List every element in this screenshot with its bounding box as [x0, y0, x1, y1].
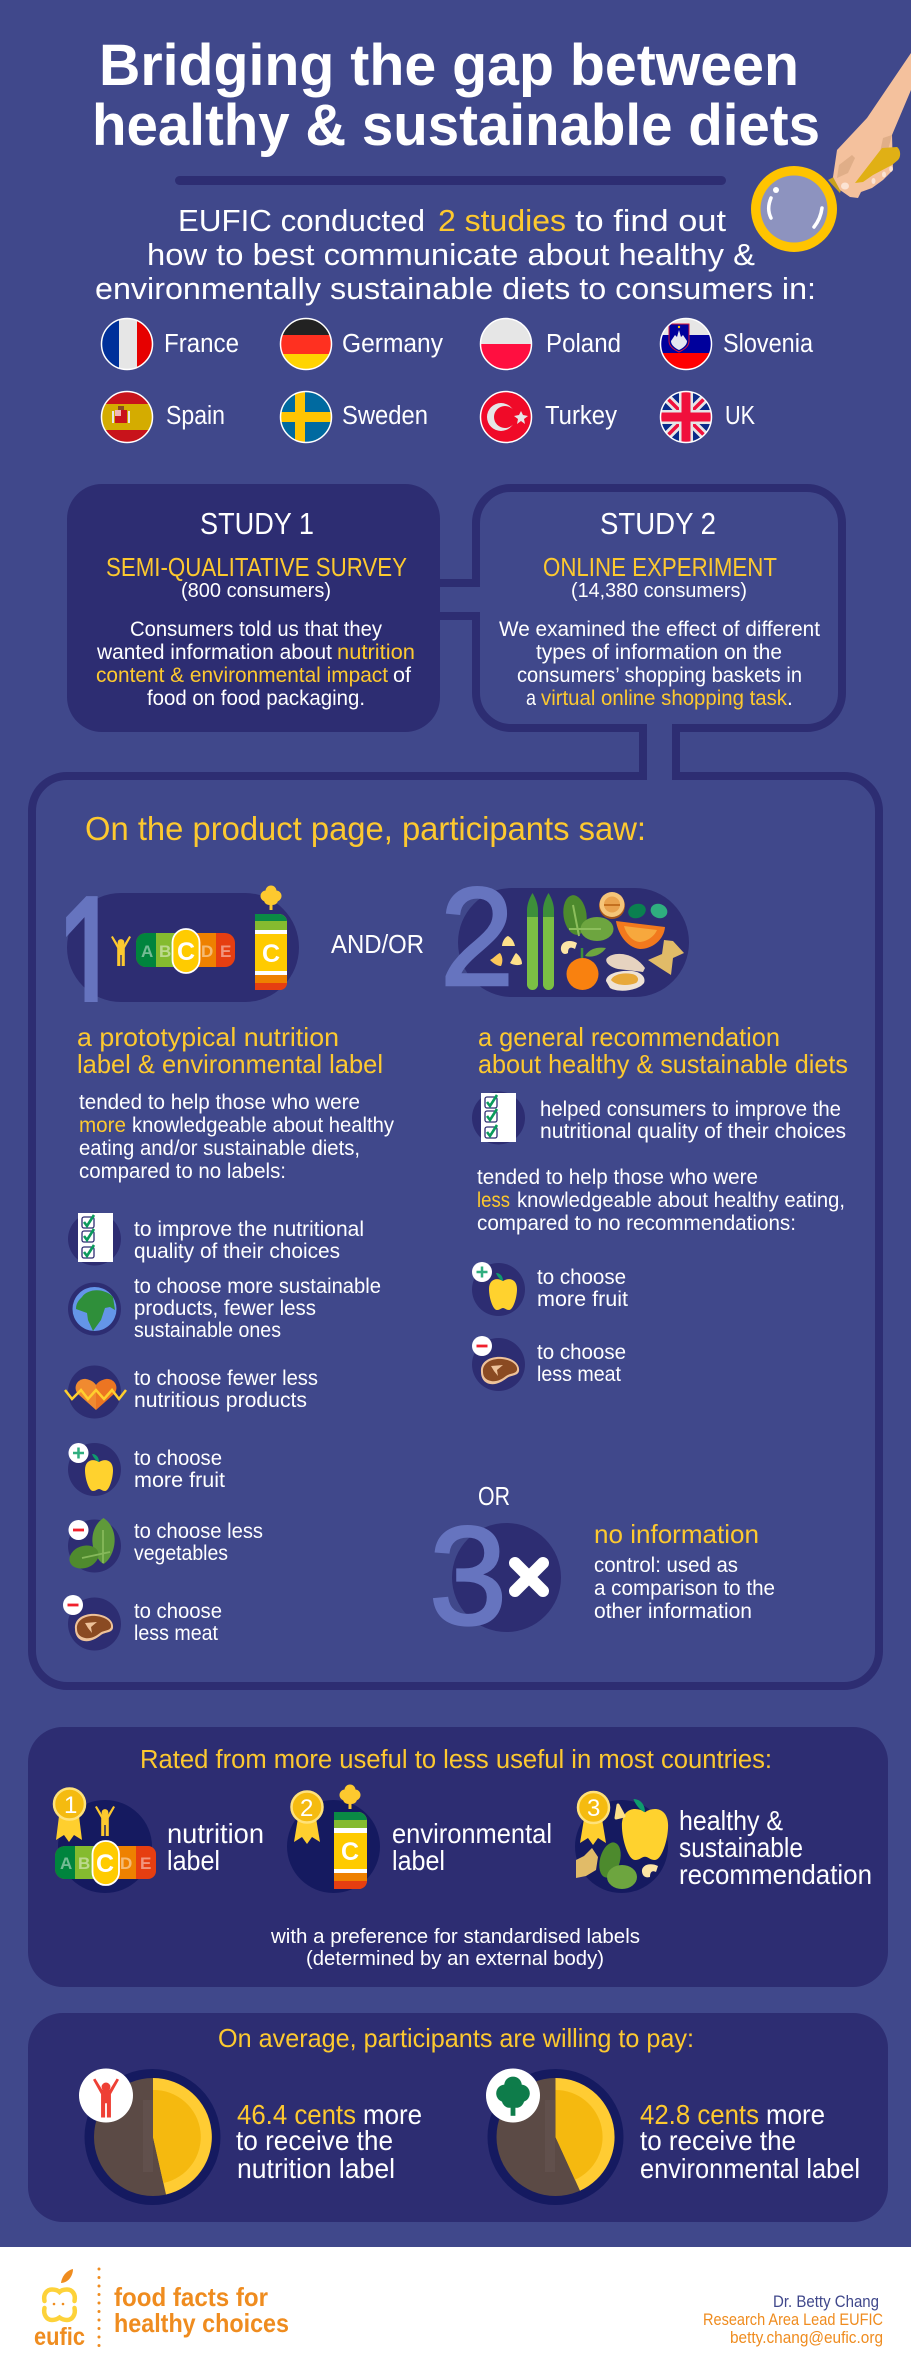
- list item: less vegetables: [66, 1518, 263, 1572]
- tagline: [114, 2282, 289, 2338]
- study 1 description: food on food packaging.: [147, 687, 365, 710]
- icon: steak minus: [63, 1595, 121, 1650]
- icon: heart with pulse: [65, 1366, 126, 1418]
- study 2 description: We examined the effect of different: [499, 618, 820, 641]
- item text: to choose: [134, 1600, 222, 1623]
- list item: more fruit: [68, 1443, 225, 1496]
- coin 2 text: [640, 2099, 860, 2184]
- author credit: betty.chang@eufic.org: [730, 2329, 883, 2347]
- study 1 heading: STUDY 1: [200, 506, 314, 541]
- label: France: France: [164, 330, 239, 358]
- rank 3: recommendation: 3: [587, 1795, 600, 1822]
- icon: nuts: [490, 936, 522, 966]
- flag: Sweden: [280, 391, 332, 443]
- study 2 description: a: [526, 687, 536, 710]
- logo: eufic: [34, 2269, 85, 2351]
- list item: more fruit (recommendation): [472, 1262, 628, 1316]
- text block: option 1 intro: [79, 1091, 394, 1183]
- coin 1 text: more: [363, 2099, 422, 2130]
- icon: green tree: [486, 2068, 540, 2122]
- flag: Turkey: [480, 391, 532, 443]
- nutrition label: A: [141, 942, 153, 961]
- flag: Spain: [101, 391, 153, 443]
- label text: sustainable: [679, 1832, 803, 1863]
- author credit: Dr. Betty Chang: [773, 2293, 879, 2311]
- icon: option 3 no information: [429, 1497, 561, 1654]
- text block: option 1 intro: tended to help those who were: [79, 1091, 360, 1114]
- item text: vegetables: [134, 1542, 228, 1565]
- rank 1: nutrition label: A: [60, 1854, 72, 1873]
- coin 1 text: 46.4 cents: [237, 2099, 356, 2130]
- label text: [167, 1818, 264, 1876]
- study 1 sample size: (800 consumers): [181, 579, 331, 602]
- intro text: EUFIC conducted: [178, 203, 425, 238]
- icon: apple plus: [68, 1443, 121, 1496]
- label text: nutrition: [167, 1818, 264, 1849]
- study 1 description: Consumers told us that they: [130, 618, 382, 641]
- flag: Germany: [280, 318, 332, 370]
- label: Turkey: Turkey: [545, 402, 617, 430]
- item text: to choose more sustainable: [134, 1275, 381, 1298]
- item text: more fruit: [537, 1288, 628, 1311]
- icon: steak minus: [472, 1336, 525, 1391]
- chart: coin 46.4 cents: [79, 2068, 220, 2205]
- icon: cashew: [561, 941, 577, 954]
- title divider: [175, 176, 726, 185]
- text block: control description: other information: [594, 1600, 752, 1623]
- flag: Slovenia: [660, 318, 712, 370]
- icon: farfalle: [648, 940, 684, 975]
- nutrition label: B: [159, 942, 171, 961]
- intro text: environmentally sustainable diets to consumers in:: [95, 271, 816, 306]
- rank 1: nutrition label: B: [78, 1854, 90, 1873]
- item text: to improve the nutritional: [134, 1218, 364, 1241]
- study 1 description: wanted information about: [96, 641, 332, 664]
- nutrition label: E: [220, 942, 231, 961]
- item text: products, fewer less: [134, 1297, 316, 1320]
- heading: Rated from more useful to less useful in most countries:: [140, 1746, 772, 1774]
- icon: spinach minus: [66, 1518, 121, 1572]
- footer: [0, 2247, 911, 2369]
- panel: willingness to pay: [28, 2013, 888, 2222]
- item text: [134, 1520, 263, 1565]
- title: Bridging the gap between: [99, 33, 799, 98]
- title: healthy & sustainable diets: [92, 93, 820, 158]
- heading: option 2: about healthy & sustainable diets: [478, 1049, 848, 1079]
- note: standardised labels: with a preference for standardised labels: [270, 1926, 640, 1948]
- rank 1: nutrition label: E: [140, 1854, 151, 1873]
- item text: [537, 1266, 628, 1311]
- flag: France: [101, 318, 153, 370]
- icon: orange slice: [616, 921, 665, 949]
- label: Poland: Poland: [546, 330, 621, 358]
- coin 1 text: nutrition label: [237, 2153, 395, 2184]
- nutrition label: [136, 929, 235, 973]
- coin 2 text: more: [766, 2099, 825, 2130]
- item text: less meat: [537, 1363, 621, 1386]
- item text: helped consumers to improve the: [540, 1098, 841, 1121]
- text block: control description: control: used as: [594, 1554, 738, 1577]
- panel outlines: study 2 and product page with connectors: [32, 488, 879, 1686]
- text block: option 1 intro: knowledgeable about healthy: [132, 1114, 394, 1137]
- intro text: to find out: [575, 203, 726, 238]
- rank 2: environmental label: [287, 1784, 380, 1893]
- item text: to choose fewer less: [134, 1367, 318, 1390]
- study 2 description: .: [787, 687, 793, 710]
- item text: to choose less: [134, 1520, 263, 1543]
- note: standardised labels: (determined by an external body): [306, 1948, 604, 1970]
- heading: option 2: a general recommendation: [478, 1022, 780, 1052]
- label: UK: UK: [725, 402, 755, 430]
- rank 2: environmental label: 2: [300, 1795, 313, 1822]
- item text: [540, 1098, 846, 1143]
- label text: environmental: [392, 1818, 552, 1849]
- list item: more sustainable: [68, 1275, 381, 1342]
- item text: quality of their choices: [134, 1240, 340, 1263]
- icon: option 1 labels: [66, 886, 299, 1002]
- rank 2: environmental label: C: [341, 1838, 359, 1866]
- icon: person: [111, 936, 131, 966]
- study 2 heading: STUDY 2: [600, 506, 716, 541]
- heading: option 2: [478, 1022, 848, 1079]
- label text: recommendation: [679, 1859, 872, 1890]
- item text: less meat: [134, 1622, 218, 1645]
- panel: usefulness rating: [28, 1727, 888, 1987]
- list item: fewer less nutritious: [65, 1366, 318, 1418]
- item text: to choose: [537, 1266, 626, 1289]
- study 1 description: nutrition: [337, 641, 415, 664]
- environmental label: C: [262, 940, 280, 968]
- icon: option 2 healthy food: [440, 858, 689, 1015]
- author credit: Research Area Lead EUFIC: [703, 2311, 883, 2329]
- icon: globe: [68, 1282, 121, 1336]
- heading: no information: no information: [594, 1519, 759, 1549]
- label: Slovenia: Slovenia: [723, 330, 814, 358]
- text block: control description: [594, 1554, 775, 1623]
- coin 2 text: environmental label: [640, 2153, 860, 2184]
- text block: option 2 intro: compared to no recommendations:: [477, 1212, 796, 1235]
- list item: less meat: [63, 1595, 222, 1650]
- heading: option 1: a prototypical nutrition: [77, 1022, 339, 1052]
- panel: study 1: [67, 484, 440, 732]
- numeral 3: 3: [429, 1497, 507, 1654]
- author credit: [703, 2293, 883, 2347]
- icon: walnut: [599, 892, 625, 919]
- heading: product page: On the product page, participants saw:: [85, 810, 646, 847]
- rank 1: nutrition label: [54, 1788, 156, 1893]
- icon: apple plus: [472, 1262, 525, 1316]
- note: standardised labels: [270, 1926, 640, 1970]
- list item: improve nutritional quality: [68, 1212, 364, 1266]
- text block: option 2 intro: tended to help those who were: [477, 1166, 758, 1189]
- text block: option 2 intro: knowledgeable about healthy eating,: [517, 1189, 845, 1212]
- item text: more fruit: [134, 1469, 225, 1492]
- label: Spain: Spain: [166, 402, 225, 430]
- nutrition label: D: [201, 942, 213, 961]
- title: [92, 33, 820, 158]
- icon: checklist: [68, 1212, 121, 1266]
- rank 1: nutrition label: D: [120, 1854, 132, 1873]
- rank 1: nutrition label: C: [96, 1850, 114, 1878]
- logo: eufic: eufic: [34, 2323, 85, 2351]
- item text: nutritional quality of their choices: [540, 1120, 846, 1143]
- label: Germany: Germany: [342, 330, 443, 358]
- text block: option 1 intro: compared to no labels:: [79, 1160, 286, 1183]
- item text: [134, 1275, 381, 1342]
- rank 3: recommendation: [575, 1792, 668, 1893]
- text block: option 1 intro: more: [79, 1114, 126, 1137]
- intro text: 2 studies: [438, 203, 566, 238]
- rank 1: nutrition label: 1: [64, 1792, 77, 1819]
- coin 1 text: to receive the: [236, 2125, 393, 2156]
- study 2 description: virtual online shopping task: [541, 687, 787, 710]
- icon: peach: [566, 948, 606, 990]
- icon: clam: [606, 954, 645, 991]
- label text: label: [167, 1845, 220, 1876]
- item text: [134, 1447, 225, 1492]
- label text: [679, 1805, 872, 1890]
- study 2 description: [499, 618, 820, 710]
- heading: On average, participants are willing to pay:: [218, 2023, 694, 2053]
- study 1 method: SEMI-QUALITATIVE SURVEY: [106, 552, 407, 582]
- label text: [392, 1818, 552, 1876]
- numeral 1: 1: [56, 860, 122, 1061]
- study 1 description: content & environmental impact: [96, 664, 388, 687]
- item text: [134, 1218, 364, 1263]
- tagline: food facts for: [114, 2282, 268, 2312]
- coin 2 text: to receive the: [640, 2125, 796, 2156]
- list item: recommendation improves quality: [472, 1092, 846, 1144]
- flag: UK: [660, 391, 712, 443]
- intro text: [95, 203, 816, 306]
- text block: control description: a comparison to the: [594, 1577, 775, 1600]
- text block: option 1 intro: eating and/or sustainable diets,: [79, 1137, 360, 1160]
- dotted divider: [98, 2269, 100, 2346]
- icon: checklist: [472, 1092, 525, 1144]
- icon: spinach: [561, 894, 614, 941]
- connector text: or: OR: [478, 1481, 510, 1511]
- icon: beans: [626, 901, 669, 921]
- icon: cross: [515, 1563, 543, 1591]
- flag: Poland: [480, 318, 532, 370]
- study 2 method: ONLINE EXPERIMENT: [543, 552, 777, 582]
- item text: [134, 1367, 318, 1412]
- heading: option 1: [77, 1022, 383, 1079]
- item text: nutritious products: [134, 1389, 307, 1412]
- environmental label: [255, 886, 287, 990]
- chart: coin 42.8 cents: [486, 2068, 624, 2205]
- tagline: healthy choices: [114, 2308, 289, 2338]
- study 2 description: types of information on the: [536, 641, 782, 664]
- panel: study 2 text: [499, 506, 820, 710]
- study 2 sample size: (14,380 consumers): [571, 579, 747, 602]
- study 1 description: [96, 618, 415, 710]
- label text: healthy &: [679, 1805, 783, 1836]
- heading: option 1: label & environmental label: [77, 1049, 383, 1079]
- icon: asparagus: [527, 893, 554, 990]
- intro text: how to best communicate about healthy &: [147, 237, 755, 272]
- text block: option 2 intro: [477, 1166, 845, 1235]
- study 2 description: consumers’ shopping baskets in: [517, 664, 802, 687]
- coin 2 text: 42.8 cents: [640, 2099, 759, 2130]
- item text: to choose: [537, 1341, 626, 1364]
- icon: red person: [79, 2068, 133, 2122]
- connector text: and/or: AND/OR: [331, 929, 424, 959]
- item text: [134, 1600, 222, 1645]
- coin 1 text: [236, 2099, 422, 2184]
- icon: hand holding magnifying glass: [751, 53, 911, 252]
- study 1 description: of: [393, 664, 411, 687]
- nutrition label: C: [177, 938, 195, 966]
- item text: to choose: [134, 1447, 222, 1470]
- label: Sweden: Sweden: [342, 402, 428, 430]
- label text: label: [392, 1845, 445, 1876]
- numeral 2: 2: [440, 858, 514, 1015]
- item text: [537, 1341, 626, 1386]
- item text: sustainable ones: [134, 1319, 281, 1342]
- list item: less meat (recommendation): [472, 1336, 626, 1391]
- text block: option 2 intro: less: [477, 1189, 510, 1212]
